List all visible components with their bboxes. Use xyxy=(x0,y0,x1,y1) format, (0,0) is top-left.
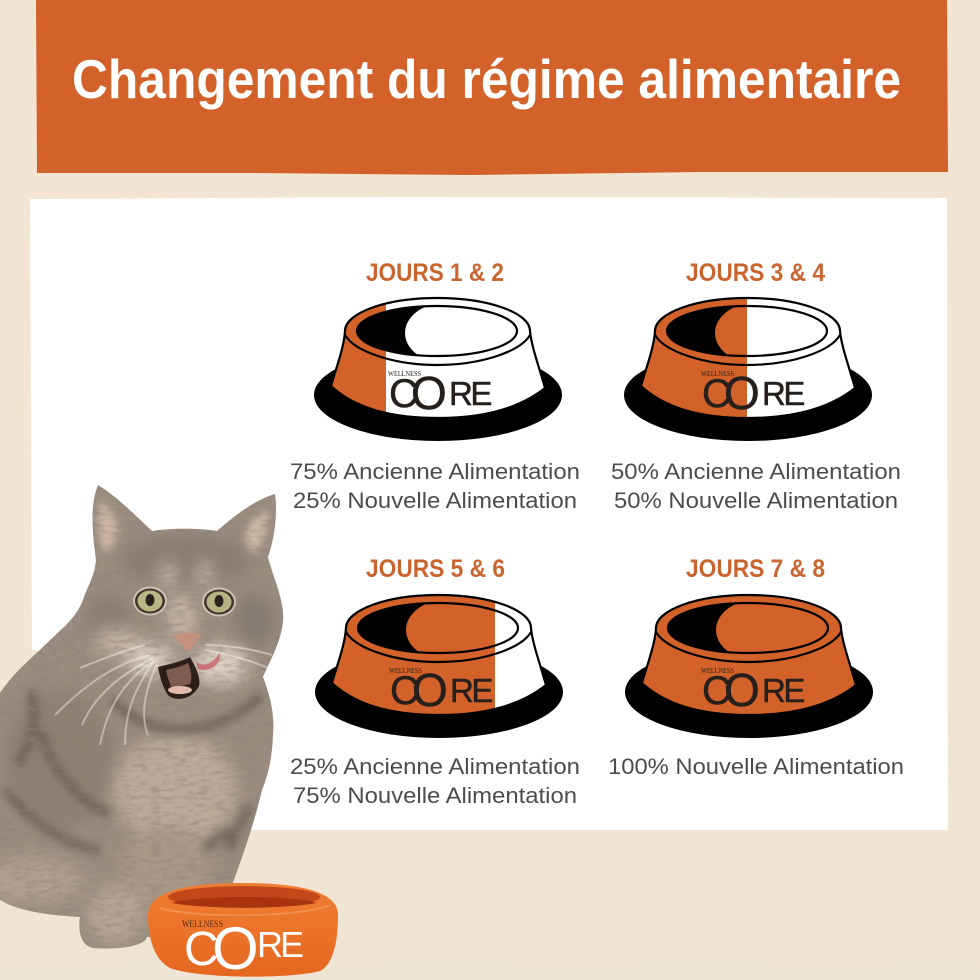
cat light fur patches xyxy=(0,561,248,945)
cat dark stripes xyxy=(5,690,262,850)
bowl 50 percent: O xyxy=(724,367,760,419)
product bowl orange: O xyxy=(212,915,259,980)
title: Changement du régime alimentaire xyxy=(72,48,901,110)
bowl 100 percent: WELLNESS xyxy=(701,667,734,675)
step: jours 3 et 4 xyxy=(611,259,901,513)
bowl 25 percent: RE xyxy=(449,375,491,412)
caption: 25% Ancienne Alimentation xyxy=(290,754,580,779)
product bowl orange: C xyxy=(184,923,219,976)
header banner xyxy=(36,0,948,175)
heading: JOURS 5 & 6 xyxy=(366,555,505,583)
step: jours 1 et 2 xyxy=(290,259,580,513)
product bowl orange: WELLNESS xyxy=(182,919,223,929)
caption: 75% Nouvelle Alimentation xyxy=(293,783,577,808)
caption: 100% Nouvelle Alimentation xyxy=(608,754,904,779)
bowl 25 percent: O xyxy=(411,367,447,419)
bowl 100 percent: RE xyxy=(762,672,804,709)
product bowl orange xyxy=(148,883,338,980)
bowl 50 percent: RE xyxy=(762,375,804,412)
bowl 100 percent xyxy=(625,595,873,738)
heading: JOURS 3 & 4 xyxy=(686,259,825,287)
bowl 25 percent xyxy=(314,298,562,441)
heading: JOURS 1 & 2 xyxy=(366,259,504,287)
bowl 75 percent: RE xyxy=(450,672,492,709)
step: jours 5 et 6 xyxy=(290,555,580,808)
bowl 100 percent: O xyxy=(724,664,760,716)
cat eyes xyxy=(133,586,236,616)
bowl 50 percent: C xyxy=(702,372,731,416)
bowl 100 percent: C xyxy=(702,669,731,713)
step: jours 7 et 8 xyxy=(608,555,904,779)
heading: JOURS 7 & 8 xyxy=(686,555,825,583)
bowl 75 percent: WELLNESS xyxy=(389,667,422,675)
caption: 25% Nouvelle Alimentation xyxy=(293,488,577,513)
caption: 50% Ancienne Alimentation xyxy=(611,459,901,484)
bowl 75 percent: O xyxy=(412,664,448,716)
bowl 50 percent xyxy=(624,298,872,441)
caption: 75% Ancienne Alimentation xyxy=(290,459,580,484)
caption: 50% Nouvelle Alimentation xyxy=(614,488,898,513)
cat photo xyxy=(0,480,290,960)
bowl 75 percent xyxy=(315,595,563,738)
product bowl orange: RE xyxy=(257,924,303,965)
cat ears xyxy=(98,500,268,555)
bowl 25 percent: WELLNESS xyxy=(388,370,421,378)
cat nose and mouth xyxy=(158,633,220,699)
bowl 25 percent: C xyxy=(389,372,418,416)
bowl 50 percent: WELLNESS xyxy=(701,370,734,378)
bowl 75 percent: C xyxy=(390,669,419,713)
panel: white feeding schedule xyxy=(30,197,948,830)
cat fur texture xyxy=(0,480,290,960)
floor xyxy=(0,830,980,980)
cat whiskers xyxy=(55,645,272,745)
cat dark fur patches xyxy=(5,535,275,830)
